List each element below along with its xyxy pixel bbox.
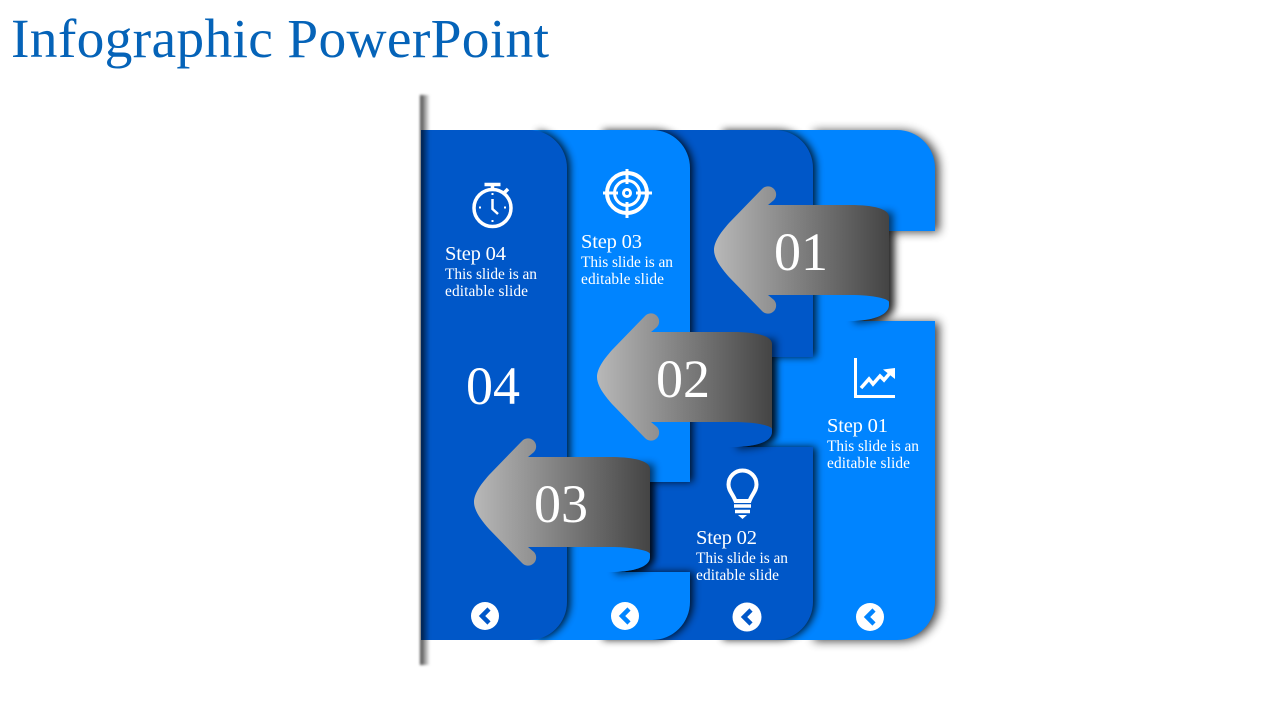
text: step 04: This slide is an — [445, 266, 537, 283]
number 04: 04 — [466, 356, 520, 416]
text: step 03: Step 03 — [581, 231, 642, 253]
text: step 01: This slide is an — [827, 438, 919, 455]
panel: step 03 — [421, 130, 693, 640]
icon: back button 1 — [856, 603, 884, 631]
title: Infographic PowerPoint — [11, 9, 550, 70]
text: step 02: editable slide — [696, 567, 779, 584]
text: step 03: editable slide — [581, 271, 664, 288]
panel: step 04 — [421, 130, 570, 640]
icon: back button 3 — [611, 602, 639, 630]
icon: line chart — [856, 358, 895, 396]
text: step 02: This slide is an — [696, 550, 788, 567]
text: step 04: editable slide — [445, 283, 528, 300]
text: step 01: Step 01 — [827, 415, 888, 437]
text: step 04: Step 04 — [445, 243, 506, 265]
panel: step 02 — [421, 130, 816, 640]
icon: stopwatch — [474, 184, 511, 226]
text: step 02: Step 02 — [696, 527, 757, 549]
arrow 03 — [474, 438, 654, 574]
text: step 03 — [581, 231, 673, 288]
text: step 02 — [696, 527, 788, 584]
arrow 01 — [714, 186, 893, 323]
panel: step 01 — [421, 130, 939, 641]
icon: back button 2 — [732, 602, 762, 632]
text: step 04 — [445, 243, 537, 300]
arrow 03: 03 — [534, 474, 588, 534]
arrow 01: 01 — [774, 222, 828, 282]
text: step 01: editable slide — [827, 455, 910, 472]
text: step 01 — [827, 415, 919, 472]
icon: target — [603, 169, 652, 218]
icon: back button 4 — [471, 602, 499, 630]
text: step 03: This slide is an — [581, 254, 673, 271]
arrow 02 — [597, 313, 776, 449]
icon: light bulb — [728, 470, 756, 519]
arrow 02: 02 — [656, 349, 710, 409]
left edge shadow line — [420, 95, 430, 665]
